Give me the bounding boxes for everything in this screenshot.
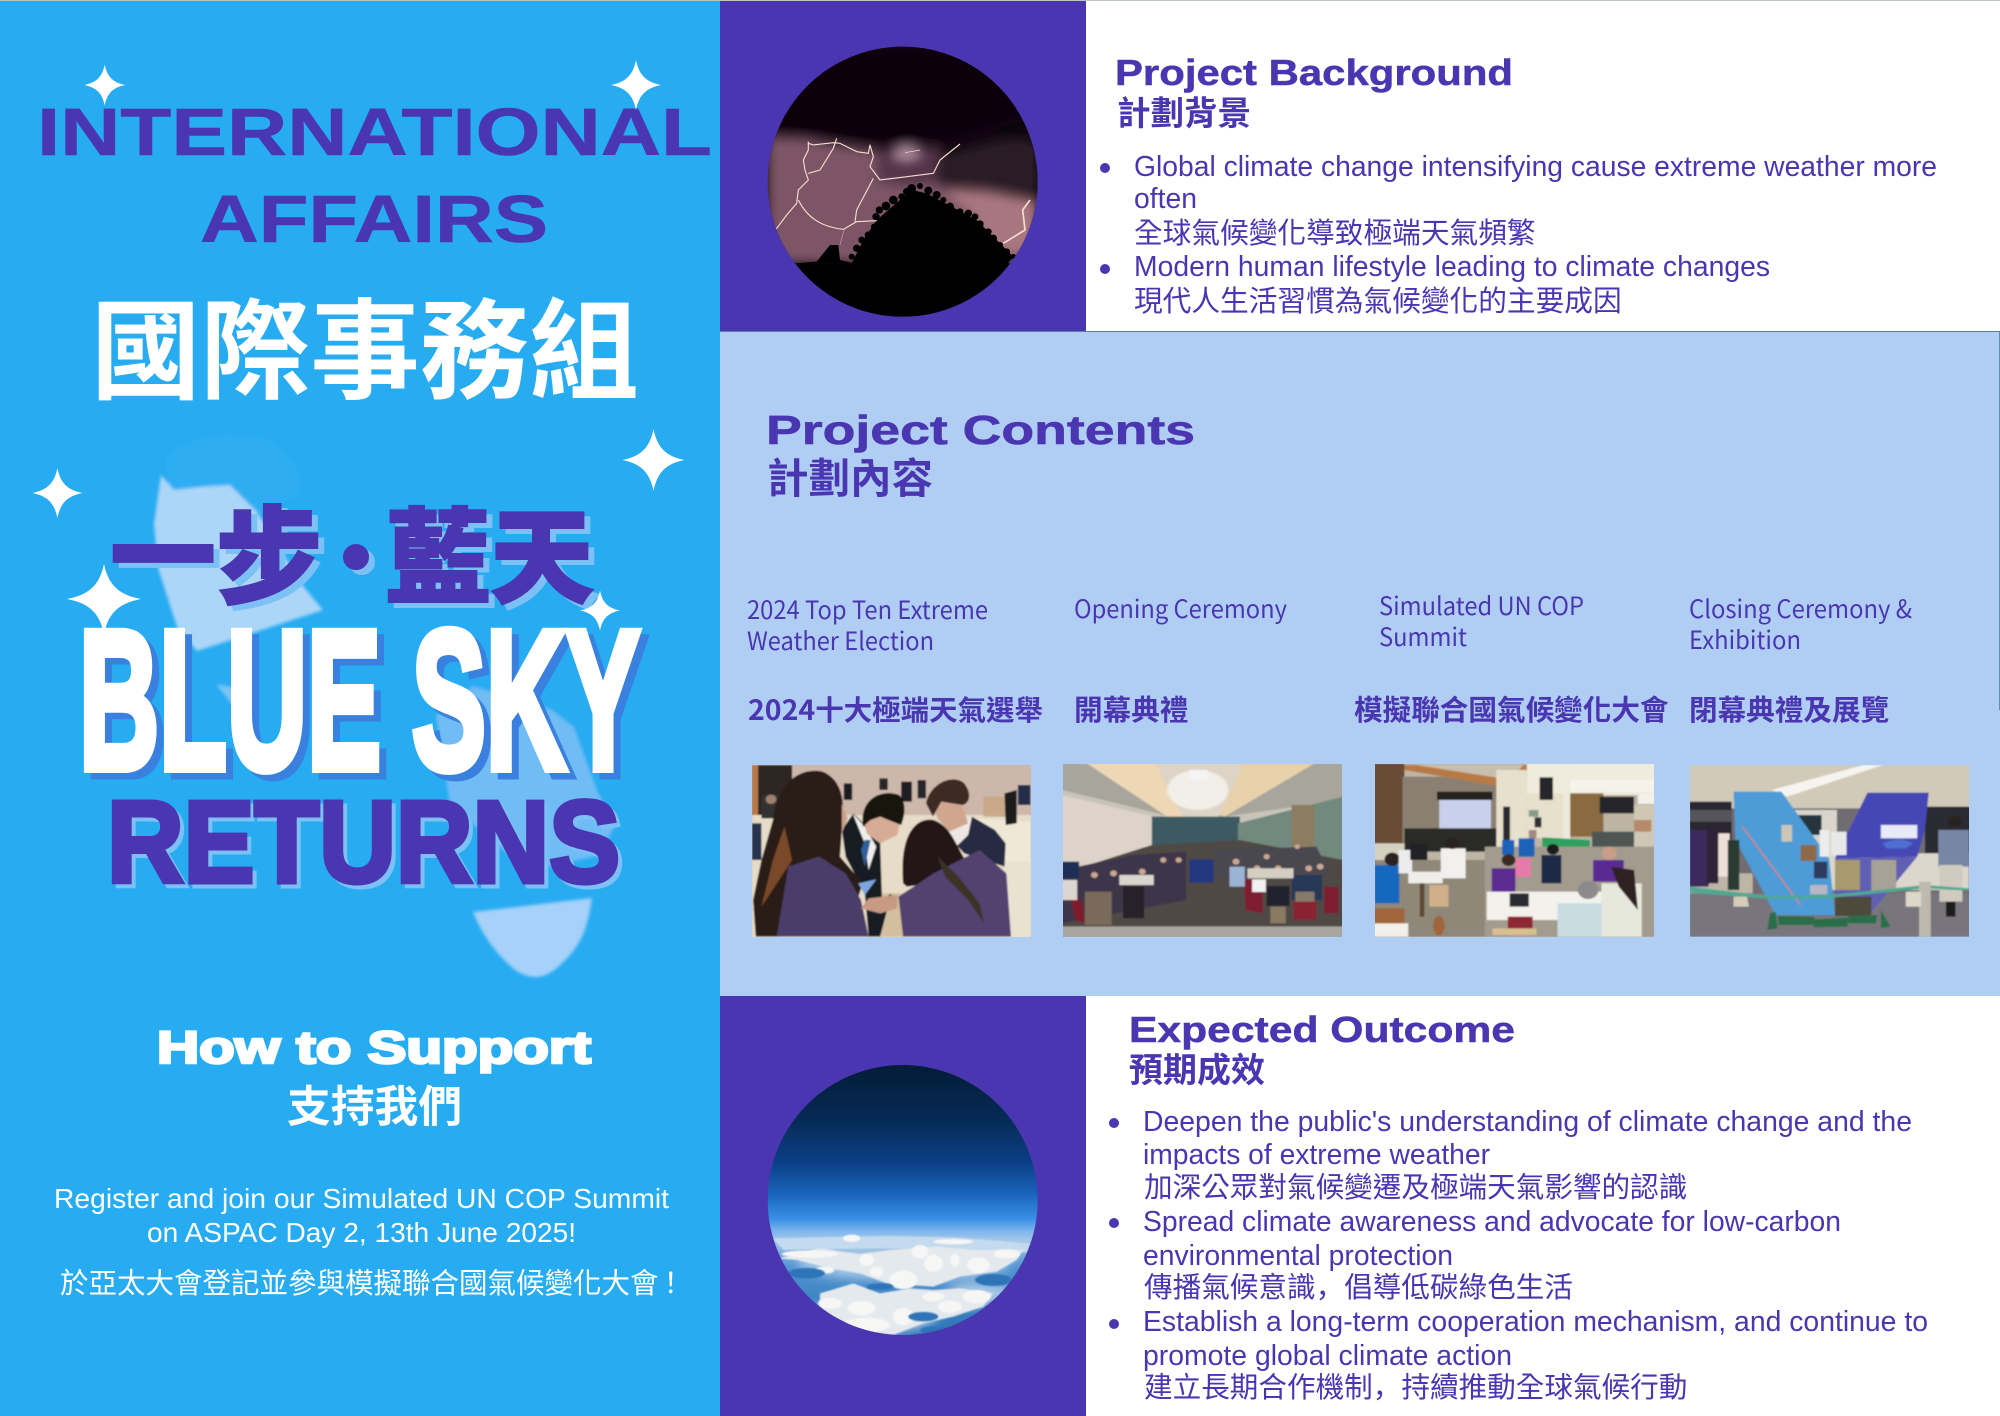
logo line: Chinese name: 藍天 (386, 474, 594, 625)
panel: left blue column (0, 1, 720, 1416)
title: International Affairs: AFFAIRS (200, 182, 548, 257)
people (1690, 830, 1709, 887)
panel: expected outcome text (1086, 996, 2000, 1416)
right man (956, 816, 1006, 868)
photo: students in discussion at banquet (750, 760, 1033, 940)
woman left (753, 771, 863, 937)
list: outcome bullets: environmental protection (1143, 1240, 1453, 1272)
column: Opening Ceremony: 開幕典禮 (1074, 688, 1188, 729)
column: Opening Ceremony: Opening Ceremony (1074, 590, 1287, 626)
logo line: Chinese name: 一步 (116, 477, 328, 631)
column: 2024 Top Ten Extreme Weather Election: Weather Election (747, 622, 934, 658)
icon: clouds from above photo (768, 1065, 1038, 1335)
title: International Affairs: INTERNATIONAL (37, 95, 712, 170)
list: outcome bullets: 建立長期合作機制，持續推動全球氣候行動 (1144, 1365, 1687, 1406)
column: Simulated UN COP Summit: Simulated UN COP (1379, 587, 1584, 623)
column: Simulated UN COP Summit (1354, 587, 1669, 729)
heading: Project Contents: 計劃內容 (767, 455, 933, 502)
column: 2024 Top Ten Extreme Weather Election: 2024十大極端天氣選舉 (748, 689, 1043, 729)
logo line: BLUE SKY: BLUE SKY (86, 596, 647, 817)
list: outcome bullets: impacts of extreme weather (1143, 1139, 1490, 1171)
heading: How to Support (157, 1022, 591, 1132)
list: outcome bullets: promote global climate action (1143, 1340, 1512, 1372)
list: background bullets: often (1134, 183, 1197, 215)
icon: lightning storm photo (768, 47, 1038, 320)
list: background bullets: 現代人生活習慣為氣候變化的主要成因 (1134, 286, 1622, 318)
woman centre (902, 818, 965, 888)
column: Opening Ceremony (1074, 590, 1287, 729)
heading: Expected Outcome: 預期成效 (1129, 1052, 1265, 1090)
list: outcome bullets: Establish a long-term cooperation mechanism, and continue to (1143, 1306, 1928, 1338)
text block: support call to action: 於亞太大會登記並參與模擬聯合國氣候變化大會！ (60, 1268, 685, 1300)
heading: Expected Outcome (1129, 1009, 1515, 1090)
logo line: Chinese name: 一步 (110, 472, 322, 626)
column: 2024 Top Ten Extreme Weather Election: 2024 Top Ten Extreme (747, 591, 988, 627)
cloud shapes behind logo (154, 434, 615, 977)
column: Closing Ceremony and Exhibition: Closing Ceremony & (1689, 590, 1912, 626)
text block: support call to action (54, 1183, 685, 1300)
column: Simulated UN COP Summit: Summit (1379, 618, 1468, 654)
heading: Project Background: 計劃背景 (1117, 96, 1251, 133)
centre man (842, 813, 892, 937)
heading: Project Contents (766, 407, 1195, 502)
list: outcome bullets: Spread climate awareness and advocate for low-carbon (1143, 1206, 1841, 1238)
column: Closing Ceremony and Exhibition: 閉幕典禮及展覽 (1689, 688, 1889, 729)
logo line: BLUE SKY: BLUE SKY (79, 590, 640, 810)
panel: project contents (720, 331, 2000, 996)
photo: closing exhibition display (1690, 765, 1971, 937)
exhibition boards (1734, 792, 1835, 915)
logo line: RETURNS: RETURNS (107, 777, 620, 907)
column: 2024 Top Ten Extreme Weather Election (747, 591, 1043, 729)
logo line: Chinese name (110, 472, 600, 631)
heading: How to Support: 支持我們 (287, 1084, 462, 1132)
list: background bullets: Modern human lifestyle leading to climate changes (1134, 251, 1770, 283)
heading: Project Background: Project Background (1115, 52, 1513, 93)
column: Simulated UN COP Summit: 模擬聯合國氣候變化大會 (1354, 688, 1669, 729)
text block: support call to action: Register and join our Simulated UN COP Summit (54, 1183, 669, 1214)
heading: Project Contents: Project Contents (766, 407, 1195, 453)
photo: simulated UN COP summit cafe (1374, 763, 1655, 938)
list: outcome bullets: 加深公眾對氣候變遷及極端天氣影響的認識 (1144, 1172, 1687, 1204)
people (1375, 865, 1399, 903)
icon: sparkles (32, 60, 684, 634)
panel: expected outcome image block (720, 996, 1086, 1416)
logo line: RETURNS: RETURNS (111, 781, 624, 911)
photo: opening ceremony ballroom group (1062, 763, 1343, 938)
list: background bullets (1100, 151, 1937, 318)
list: background bullets: 全球氣候變化導致極端天氣頻繁 (1134, 218, 1536, 250)
logo line: BLUE SKY (79, 590, 647, 817)
list: background bullets: Global climate change intensifying cause extreme weather more (1134, 151, 1937, 183)
logo: Blue Sky Returns (79, 472, 647, 911)
heading: How to Support: How to Support (157, 1022, 591, 1073)
list: outcome bullets: Deepen the public's understanding of climate change and the (1143, 1106, 1912, 1138)
column: Closing Ceremony and Exhibition (1689, 590, 1912, 729)
heading: Expected Outcome: Expected Outcome (1129, 1009, 1515, 1050)
ribbon (1690, 885, 1969, 899)
column: Closing Ceremony and Exhibition: Exhibition (1689, 621, 1801, 657)
panel: project background image block (720, 1, 1086, 331)
list: outcome bullets (1109, 1106, 1928, 1406)
list: outcome bullets: 傳播氣候意識，倡導低碳綠色生活 (1144, 1265, 1573, 1306)
title: International Affairs (37, 95, 712, 257)
logo line: Chinese name: 藍天 (392, 479, 600, 630)
title: Chinese group name: 國際事務組 (91, 292, 639, 414)
text block: support call to action: on ASPAC Day 2, 13th June 2025! (147, 1217, 576, 1248)
tree and ground (795, 183, 1016, 317)
heading: Project Background (1115, 52, 1513, 133)
panel: project background text (1086, 1, 2000, 331)
